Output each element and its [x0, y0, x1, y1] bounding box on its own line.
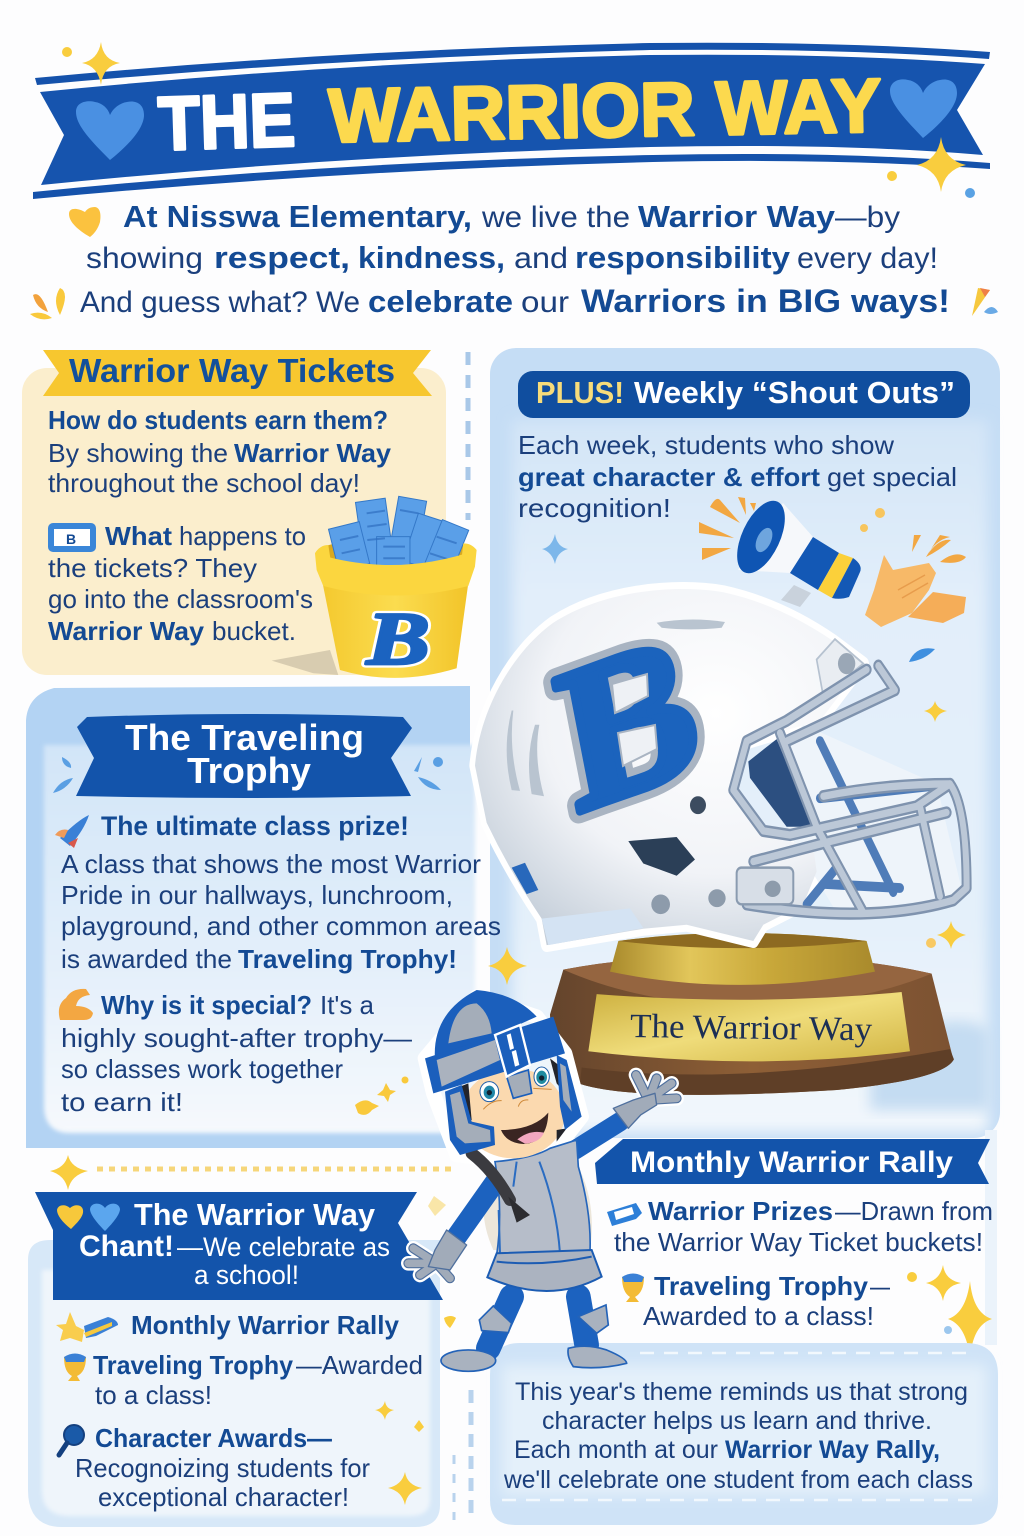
icon: right blue heart [890, 79, 957, 138]
text block: the ultimate class prize [61, 811, 501, 974]
intro text: Warrior Way [638, 199, 836, 234]
text block: what happens to tickets [48, 521, 313, 646]
knight helmet [425, 990, 582, 1155]
text block: what happens to tickets: Warrior Way [48, 616, 205, 646]
text block: why is it special: Why is it special? [101, 990, 312, 1020]
text block: warrior prizes: the Warrior Way Ticket buckets! [614, 1227, 983, 1257]
text block: why is it special [61, 990, 412, 1117]
heading: plus weekly shout outs: Weekly “Shout Outs” [634, 375, 955, 410]
helmet ear hole and rivets [628, 837, 695, 876]
torso armour [495, 1140, 590, 1255]
icon: right confetti [972, 288, 998, 316]
sparkle by helmet [488, 947, 527, 985]
icon: yellow bucket with tickets: B [365, 598, 430, 681]
text block: monthly warrior rally: Monthly Warrior Rally [131, 1310, 400, 1340]
intro text: respect, [214, 240, 350, 275]
text block: why is it special: highly sought-after trophy— [61, 1023, 412, 1053]
blue wash behind trophy [870, 1021, 990, 1110]
mouth [501, 1113, 548, 1144]
gauntlets and hands [408, 1075, 677, 1278]
icon: blue sparkle [542, 534, 568, 564]
text block: traveling trophy award [643, 1271, 890, 1331]
icon: small trophy [622, 1274, 644, 1302]
heading ribbon: warrior way tickets [43, 350, 432, 396]
intro text: our [521, 286, 569, 319]
heading ribbon: chant: Chant! [79, 1230, 174, 1263]
heading ribbon: chant: The Warrior Way [134, 1197, 376, 1232]
icon: sparkle and dotted line [50, 1155, 452, 1190]
text block: traveling trophy award: Traveling Trophy [654, 1271, 869, 1301]
mascot: knight character [408, 990, 677, 1371]
intro text: showing [86, 242, 203, 275]
title banner [33, 43, 990, 199]
helmet jaw trim [542, 908, 643, 945]
icon: left blue heart [76, 101, 144, 160]
text block: what happens to tickets: bucket. [212, 616, 296, 646]
interior of face opening [770, 725, 963, 912]
white halo [408, 997, 677, 1353]
divider: dashed vertical line [466, 352, 470, 520]
text block: the ultimate class prize: Traveling Trophy! [238, 944, 457, 974]
text block: traveling trophy award: Awarded to a class! [643, 1301, 874, 1331]
trophy base with plaque [550, 933, 954, 1095]
text block: character awards: Recognoizing students for [75, 1453, 370, 1483]
intro text: we live the [481, 201, 630, 234]
intro text: kindness, [358, 240, 505, 275]
heading ribbon: monthly warrior rally: Monthly Warrior Rally [630, 1146, 953, 1179]
icon: tickets [607, 1203, 642, 1226]
intro text: Warriors in BIG ways! [581, 283, 950, 319]
heading ribbon: the traveling trophy [76, 714, 412, 798]
text block: character awards [75, 1423, 370, 1512]
heading ribbon: chant: a school! [194, 1260, 299, 1290]
icon: ticket: B [66, 531, 76, 547]
text block: the ultimate class prize: Pride in our hallways, lunchroom, [61, 880, 453, 910]
text block: shout outs description: get special [827, 462, 957, 492]
text block: what happens to tickets: happens to [179, 521, 306, 551]
icon: yellow bucket with tickets: B [365, 598, 430, 681]
text block: why is it special: It's a [320, 990, 375, 1020]
panel: warrior way chant [28, 1155, 456, 1527]
helmet B logo: B [543, 589, 713, 855]
heading ribbon: chant [35, 1192, 443, 1300]
icon: megaphone [727, 494, 861, 607]
text block: what happens to tickets: go into the classroom's [48, 584, 313, 614]
face mask [733, 666, 967, 914]
heading ribbon: the traveling trophy: Trophy [187, 750, 311, 791]
icon: ticket [48, 523, 96, 552]
text block: traveling trophy award: — [870, 1271, 890, 1301]
icon: small trophy [64, 1354, 86, 1381]
text block: the ultimate class prize: The ultimate class prize! [101, 811, 409, 841]
text block: how to earn tickets: throughout the school day! [48, 468, 360, 498]
helmet vents and highlights [507, 620, 725, 796]
text block: warrior prizes: —Drawn from [835, 1196, 993, 1226]
intro text: celebrate [368, 284, 513, 319]
text block: traveling trophy: —Awarded [296, 1350, 423, 1380]
icon: flexed arm [59, 989, 93, 1020]
heading ribbon: chant: —We celebrate as [177, 1232, 390, 1262]
armour skirt [487, 1250, 602, 1291]
text block: warrior prizes: Warrior Prizes [648, 1196, 833, 1226]
cape [484, 1170, 592, 1250]
text block: how to earn tickets: Warrior Way [234, 438, 392, 468]
text block: why is it special: so classes work together [61, 1054, 343, 1084]
face [462, 1068, 565, 1158]
text block: character awards: exceptional character! [98, 1482, 349, 1512]
eyes [480, 1067, 552, 1109]
sparkles right of helmet [924, 701, 966, 949]
icon: star and rocket [56, 1312, 118, 1342]
text block: the ultimate class prize: playground, and other common areas [61, 911, 501, 941]
text block: what happens to tickets: What [105, 521, 172, 551]
title text: THE [157, 78, 296, 167]
panel: theme note [490, 1343, 998, 1525]
icon: clapping hands [865, 555, 966, 627]
text block: how to earn tickets: By showing the [48, 438, 228, 468]
braid [472, 1153, 530, 1223]
text block: shout outs description: great character & effort [518, 462, 820, 492]
icon: yellow bucket with tickets [272, 496, 477, 681]
intro text: And guess what? We [80, 286, 360, 319]
text block: how to earn tickets: How do students earn them? [48, 405, 388, 435]
intro text: responsibility [575, 240, 791, 275]
intro text: every day! [797, 242, 938, 275]
text block: shout outs description: recognition! [518, 493, 671, 523]
icon: magnifying glass [59, 1425, 84, 1455]
heading ribbon: the traveling trophy: The Traveling [125, 717, 364, 758]
text block: the ultimate class prize: is awarded the [61, 944, 232, 974]
panel: theme note: we'll celebrate one student from each class [503, 1466, 973, 1494]
divider: dashed lines lower middle [454, 1390, 471, 1520]
intro text [30, 199, 998, 319]
heading ribbon: monthly warrior rally [595, 1139, 990, 1184]
icon: sparkles around banner [62, 42, 975, 198]
title text: WARRIOR WAY [328, 63, 882, 159]
text block: shout outs description: Each week, students who show [518, 430, 894, 460]
intro text: —by [835, 201, 900, 234]
panel: monthly warrior rally [490, 1139, 998, 1525]
heading: plus weekly shout outs: PLUS! [536, 375, 624, 410]
panel: warrior way tickets [22, 350, 477, 681]
heading: plus weekly shout outs [518, 371, 970, 418]
panel: theme note: character helps us learn and thrive. [542, 1407, 932, 1435]
icon: rocket [55, 815, 89, 848]
helmet B logo: B [543, 589, 713, 855]
text block: shout outs description [518, 430, 957, 523]
text block: character awards: Character Awards— [95, 1423, 332, 1453]
text block: traveling trophy [93, 1350, 423, 1410]
plaque text: The Warrior Way [630, 1008, 872, 1048]
icon: football helmet [475, 589, 967, 945]
text block: warrior prizes [614, 1196, 993, 1257]
text block: what happens to tickets: the tickets? They [48, 553, 257, 583]
panel: the traveling trophy [26, 686, 501, 1148]
text block: how to earn tickets [48, 405, 392, 498]
text block: traveling trophy: Traveling Trophy [93, 1350, 294, 1380]
arms and legs [457, 1122, 620, 1348]
icon: yellow heart [69, 207, 100, 237]
icon: left burst [30, 288, 65, 319]
icon: small stars [355, 1076, 408, 1115]
text block: traveling trophy: to a class! [95, 1380, 212, 1410]
icon: speech bursts [699, 497, 966, 563]
text block: why is it special: to earn it! [61, 1087, 183, 1117]
heading ribbon: warrior way tickets: Warrior Way Tickets [69, 352, 395, 389]
icon: yellow and blue hearts [57, 1204, 120, 1231]
intro text: and [514, 242, 568, 275]
panel: theme note: Warrior Way Rally, [725, 1436, 940, 1464]
panel: theme note: This year's theme reminds us that strong [515, 1378, 968, 1406]
icon: sparkles [375, 1196, 456, 1505]
icon: water splashes [53, 757, 443, 793]
text block: the ultimate class prize: A class that shows the most Warrior [61, 849, 481, 879]
icon: blue drop [909, 648, 935, 662]
intro text: At Nisswa Elementary, [123, 199, 472, 234]
panel: weekly shout outs [490, 348, 1000, 1345]
icon: sparkles [907, 1265, 992, 1358]
panel: theme note: Each month at our [514, 1436, 718, 1464]
legs armour and boots [441, 1305, 627, 1371]
